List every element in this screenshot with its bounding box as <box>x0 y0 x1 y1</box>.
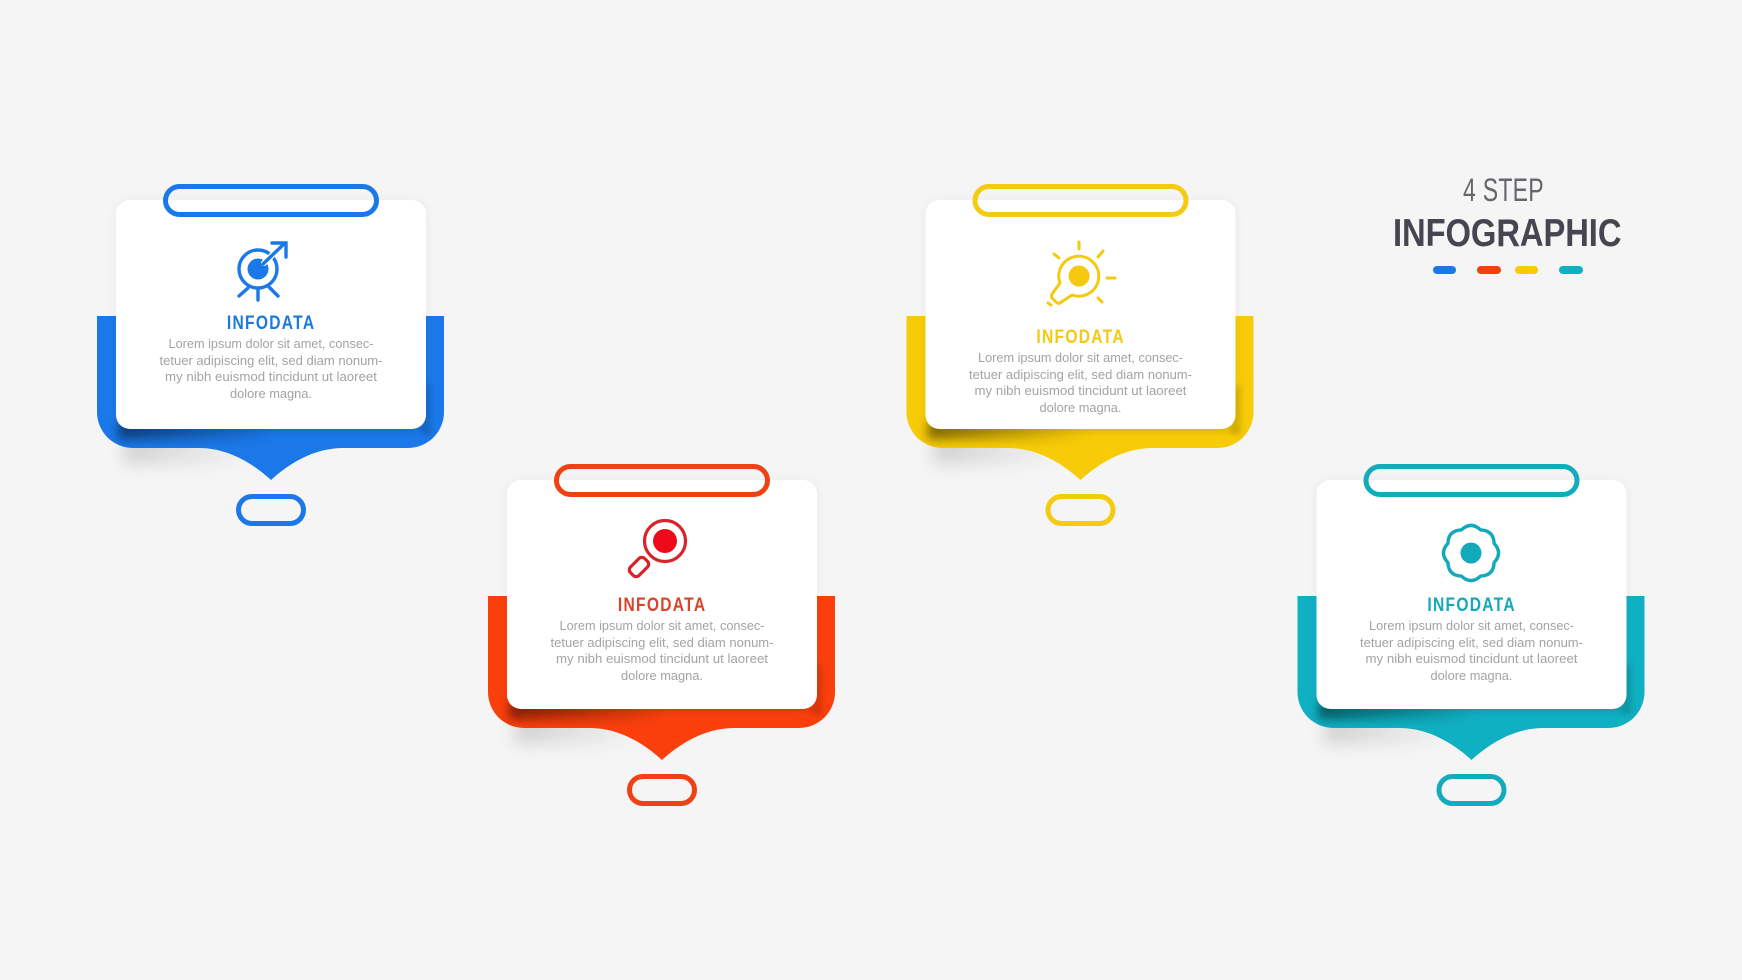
top pill <box>166 186 376 214</box>
infographic canvas <box>97 178 1644 806</box>
top pill <box>975 186 1186 214</box>
body text: Lorem ipsum dolor sit amet, consec- <box>168 336 374 351</box>
body text: my nibh euismod tincidunt ut laoreet <box>165 369 377 384</box>
body text: tetuer adipiscing elit, sed diam nonum- <box>160 353 382 368</box>
colored backing shape with pointer <box>1298 596 1644 760</box>
title: 4 STEP: 4 STEP <box>1463 172 1544 208</box>
panel: step 1 blue <box>97 186 444 524</box>
body text: my nibh euismod tincidunt ut laoreet <box>556 651 768 666</box>
body text: Lorem ipsum dolor sit amet, consec- <box>1369 618 1574 633</box>
heading: INFODATA <box>1427 593 1515 615</box>
inner shadow under card <box>928 385 1240 440</box>
body text: tetuer adipiscing elit, sed diam nonum- <box>969 367 1192 382</box>
body text: my nibh euismod tincidunt ut laoreet <box>1366 651 1578 666</box>
body text: Lorem ipsum dolor sit amet, consec- <box>978 350 1183 365</box>
white card <box>507 480 817 709</box>
body text <box>550 618 774 683</box>
title: INFOGRAPHIC: INFOGRAPHIC <box>1393 210 1621 255</box>
inner shadow under card <box>118 385 431 440</box>
bottom pill <box>630 776 694 804</box>
panel: step 3 yellow <box>906 186 1254 524</box>
white card <box>926 200 1236 429</box>
body text: Lorem ipsum dolor sit amet, consec- <box>560 618 764 633</box>
bottom pill <box>1048 496 1113 524</box>
ground shadow <box>515 716 645 744</box>
heading: INFODATA <box>618 593 705 615</box>
ground shadow <box>124 436 254 464</box>
inner shadow under card <box>509 665 822 720</box>
heading: INFODATA <box>227 311 314 333</box>
top pill <box>1366 466 1577 494</box>
heading: INFODATA <box>1036 325 1124 347</box>
icon: light bulb <box>1048 242 1115 305</box>
white card <box>116 200 426 429</box>
body text: dolore magna. <box>1040 400 1122 415</box>
panel: step 4 teal <box>1298 466 1644 804</box>
colored backing shape with pointer <box>97 316 444 480</box>
legend dashes <box>1433 266 1583 274</box>
top pill <box>556 466 768 494</box>
bottom pill <box>238 496 304 524</box>
icon: target with arrow <box>239 243 286 300</box>
body text: dolore magna. <box>621 668 703 683</box>
body text <box>1360 618 1583 683</box>
ground shadow <box>1324 716 1454 744</box>
colored backing shape with pointer <box>906 316 1254 480</box>
body text: tetuer adipiscing elit, sed diam nonum- <box>550 635 774 650</box>
white card <box>1316 480 1626 709</box>
body text <box>969 350 1192 415</box>
panel: step 2 red <box>488 466 835 804</box>
ground shadow <box>934 436 1064 464</box>
inner shadow under card <box>1318 665 1632 720</box>
colored backing shape with pointer <box>488 596 835 760</box>
body text: dolore magna. <box>1430 668 1512 683</box>
body text: dolore magna. <box>230 386 312 401</box>
title block <box>1393 172 1621 274</box>
icon: magnifying glass <box>628 520 686 578</box>
body text <box>160 336 382 401</box>
body text: tetuer adipiscing elit, sed diam nonum- <box>1360 635 1583 650</box>
bottom pill <box>1439 776 1504 804</box>
icon: gear badge <box>1443 525 1499 581</box>
body text: my nibh euismod tincidunt ut laoreet <box>974 383 1187 398</box>
